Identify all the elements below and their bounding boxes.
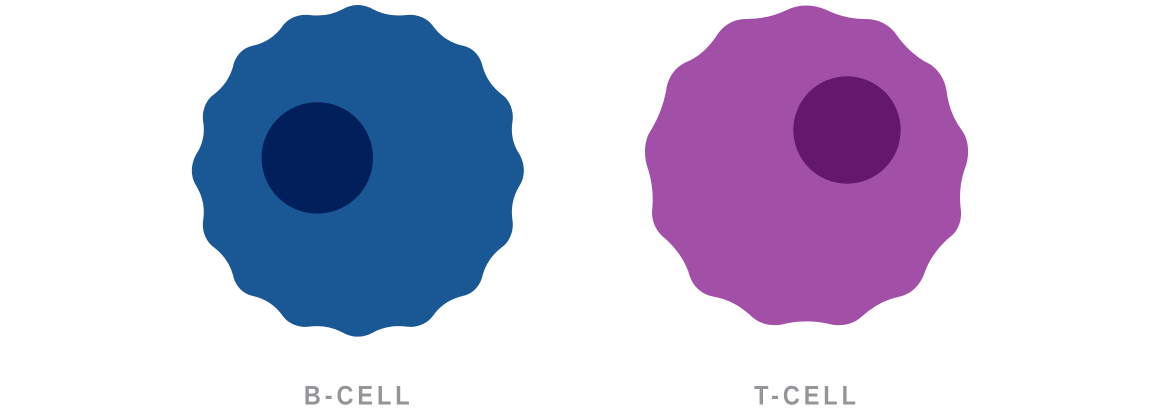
nucleus: B-cell: [262, 102, 373, 214]
panel: T-cell: [645, 5, 968, 411]
nucleus: T-cell: [793, 76, 901, 184]
label: B-cell: B-CELL: [304, 381, 413, 411]
label: T-cell: T-CELL: [754, 381, 860, 411]
cell body: B-cell: [192, 5, 524, 337]
panel: B-cell: [192, 5, 524, 411]
cell body: T-cell: [645, 5, 968, 325]
